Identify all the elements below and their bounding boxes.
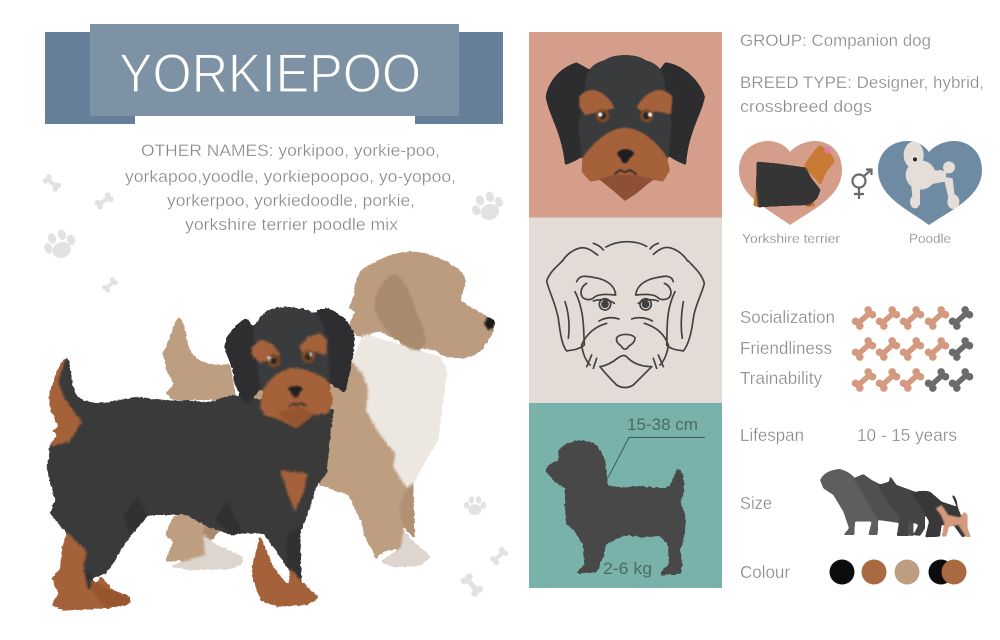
- illustration: black and tan yorkiepoo: [47, 307, 354, 611]
- rating: trainability: [740, 367, 975, 393]
- size comparison silhouettes: [820, 469, 971, 537]
- breed type text: [740, 73, 984, 116]
- rating: trainability: Trainability: [740, 368, 822, 388]
- panel: coloured face: [529, 32, 722, 218]
- size label: Size: [740, 493, 772, 513]
- other names text: yorkapoo,yoodle, yorkiepoopoo, yo-yopoo,: [125, 167, 456, 186]
- panel: silhouette with size and weight: 2-6 kg: [603, 559, 652, 578]
- rating: socialization: Socialization: [740, 307, 835, 327]
- colour label: Colour: [740, 562, 790, 582]
- panel: line art face: [529, 218, 722, 403]
- rating: friendliness: Friendliness: [740, 338, 832, 358]
- colour swatches: [830, 560, 966, 584]
- heart: Poodle: [878, 141, 982, 225]
- lifespan: 10 - 15 years: [857, 425, 957, 445]
- lifespan: [740, 425, 957, 445]
- other names text: yorkshire terrier poodle mix: [185, 215, 399, 234]
- breed type text: BREED TYPE: Designer, hybrid,: [740, 73, 984, 92]
- icon: gender symbol: [852, 170, 872, 199]
- panel: silhouette with size and weight: [529, 403, 722, 588]
- label: Poodle: Poodle: [909, 232, 951, 246]
- other names text: OTHER NAMES: yorkipoo, yorkie-poo,: [141, 141, 440, 160]
- label: Yorkshire terrier: Yorkshire terrier: [742, 232, 840, 246]
- rating: socialization: [740, 305, 975, 331]
- rating: friendliness: [740, 336, 975, 362]
- lifespan: Lifespan: [740, 425, 804, 445]
- illustration: tan poodle-type dog: [163, 251, 495, 570]
- other names text: [125, 141, 456, 234]
- title banner: [45, 24, 503, 124]
- decorative paws and bones: [40, 173, 509, 598]
- breed type text: crossbreed dogs: [740, 97, 872, 116]
- title banner: YORKIEPOO: [119, 42, 421, 104]
- panel: silhouette with size and weight: 15-38 cm: [627, 415, 698, 434]
- heart: Yorkshire terrier: [739, 141, 842, 225]
- group text: GROUP: Companion dog: [740, 31, 931, 50]
- other names text: yorkerpoo, yorkiedoodle, porkie,: [167, 191, 415, 210]
